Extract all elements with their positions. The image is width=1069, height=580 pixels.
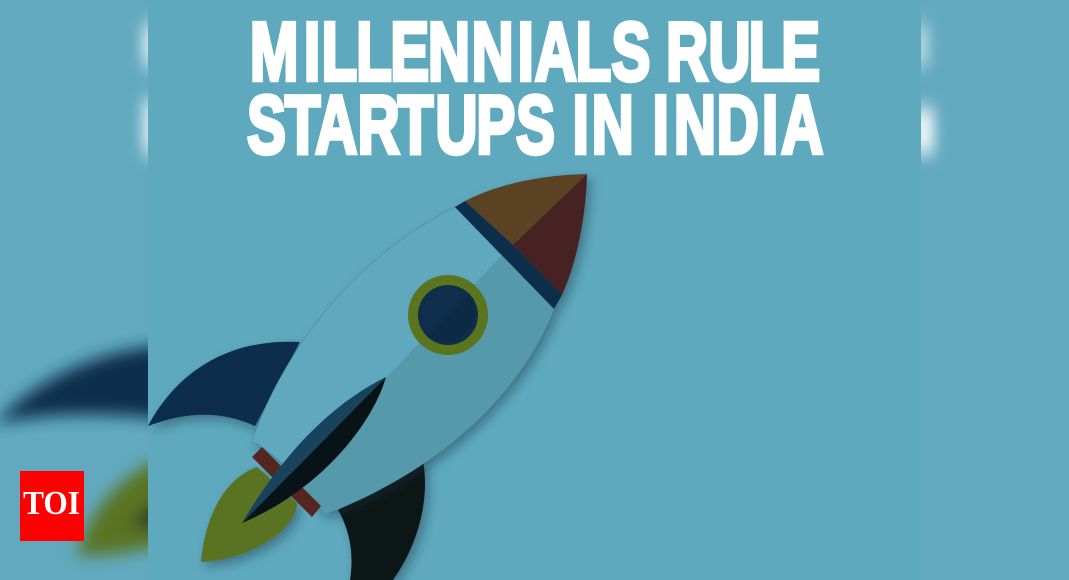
rocket left fin xyxy=(148,342,300,426)
title: MILLENNIALS RULE xyxy=(250,6,820,98)
rocket centre fin xyxy=(242,377,386,523)
rocket right fin xyxy=(338,460,425,580)
title xyxy=(247,6,823,171)
rocket hull xyxy=(252,174,587,514)
title: STARTUPS IN INDIA xyxy=(247,79,823,171)
right blurred backdrop panel xyxy=(921,11,946,170)
icon: rocket xyxy=(148,174,587,580)
left blurred backdrop panel xyxy=(0,10,148,568)
logo: TOI badge xyxy=(20,471,84,541)
rocket nozzle bar xyxy=(252,447,321,517)
rocket exhaust flame xyxy=(201,467,297,562)
logo: TOI badge: TOI xyxy=(23,485,80,522)
rocket window xyxy=(408,275,488,355)
